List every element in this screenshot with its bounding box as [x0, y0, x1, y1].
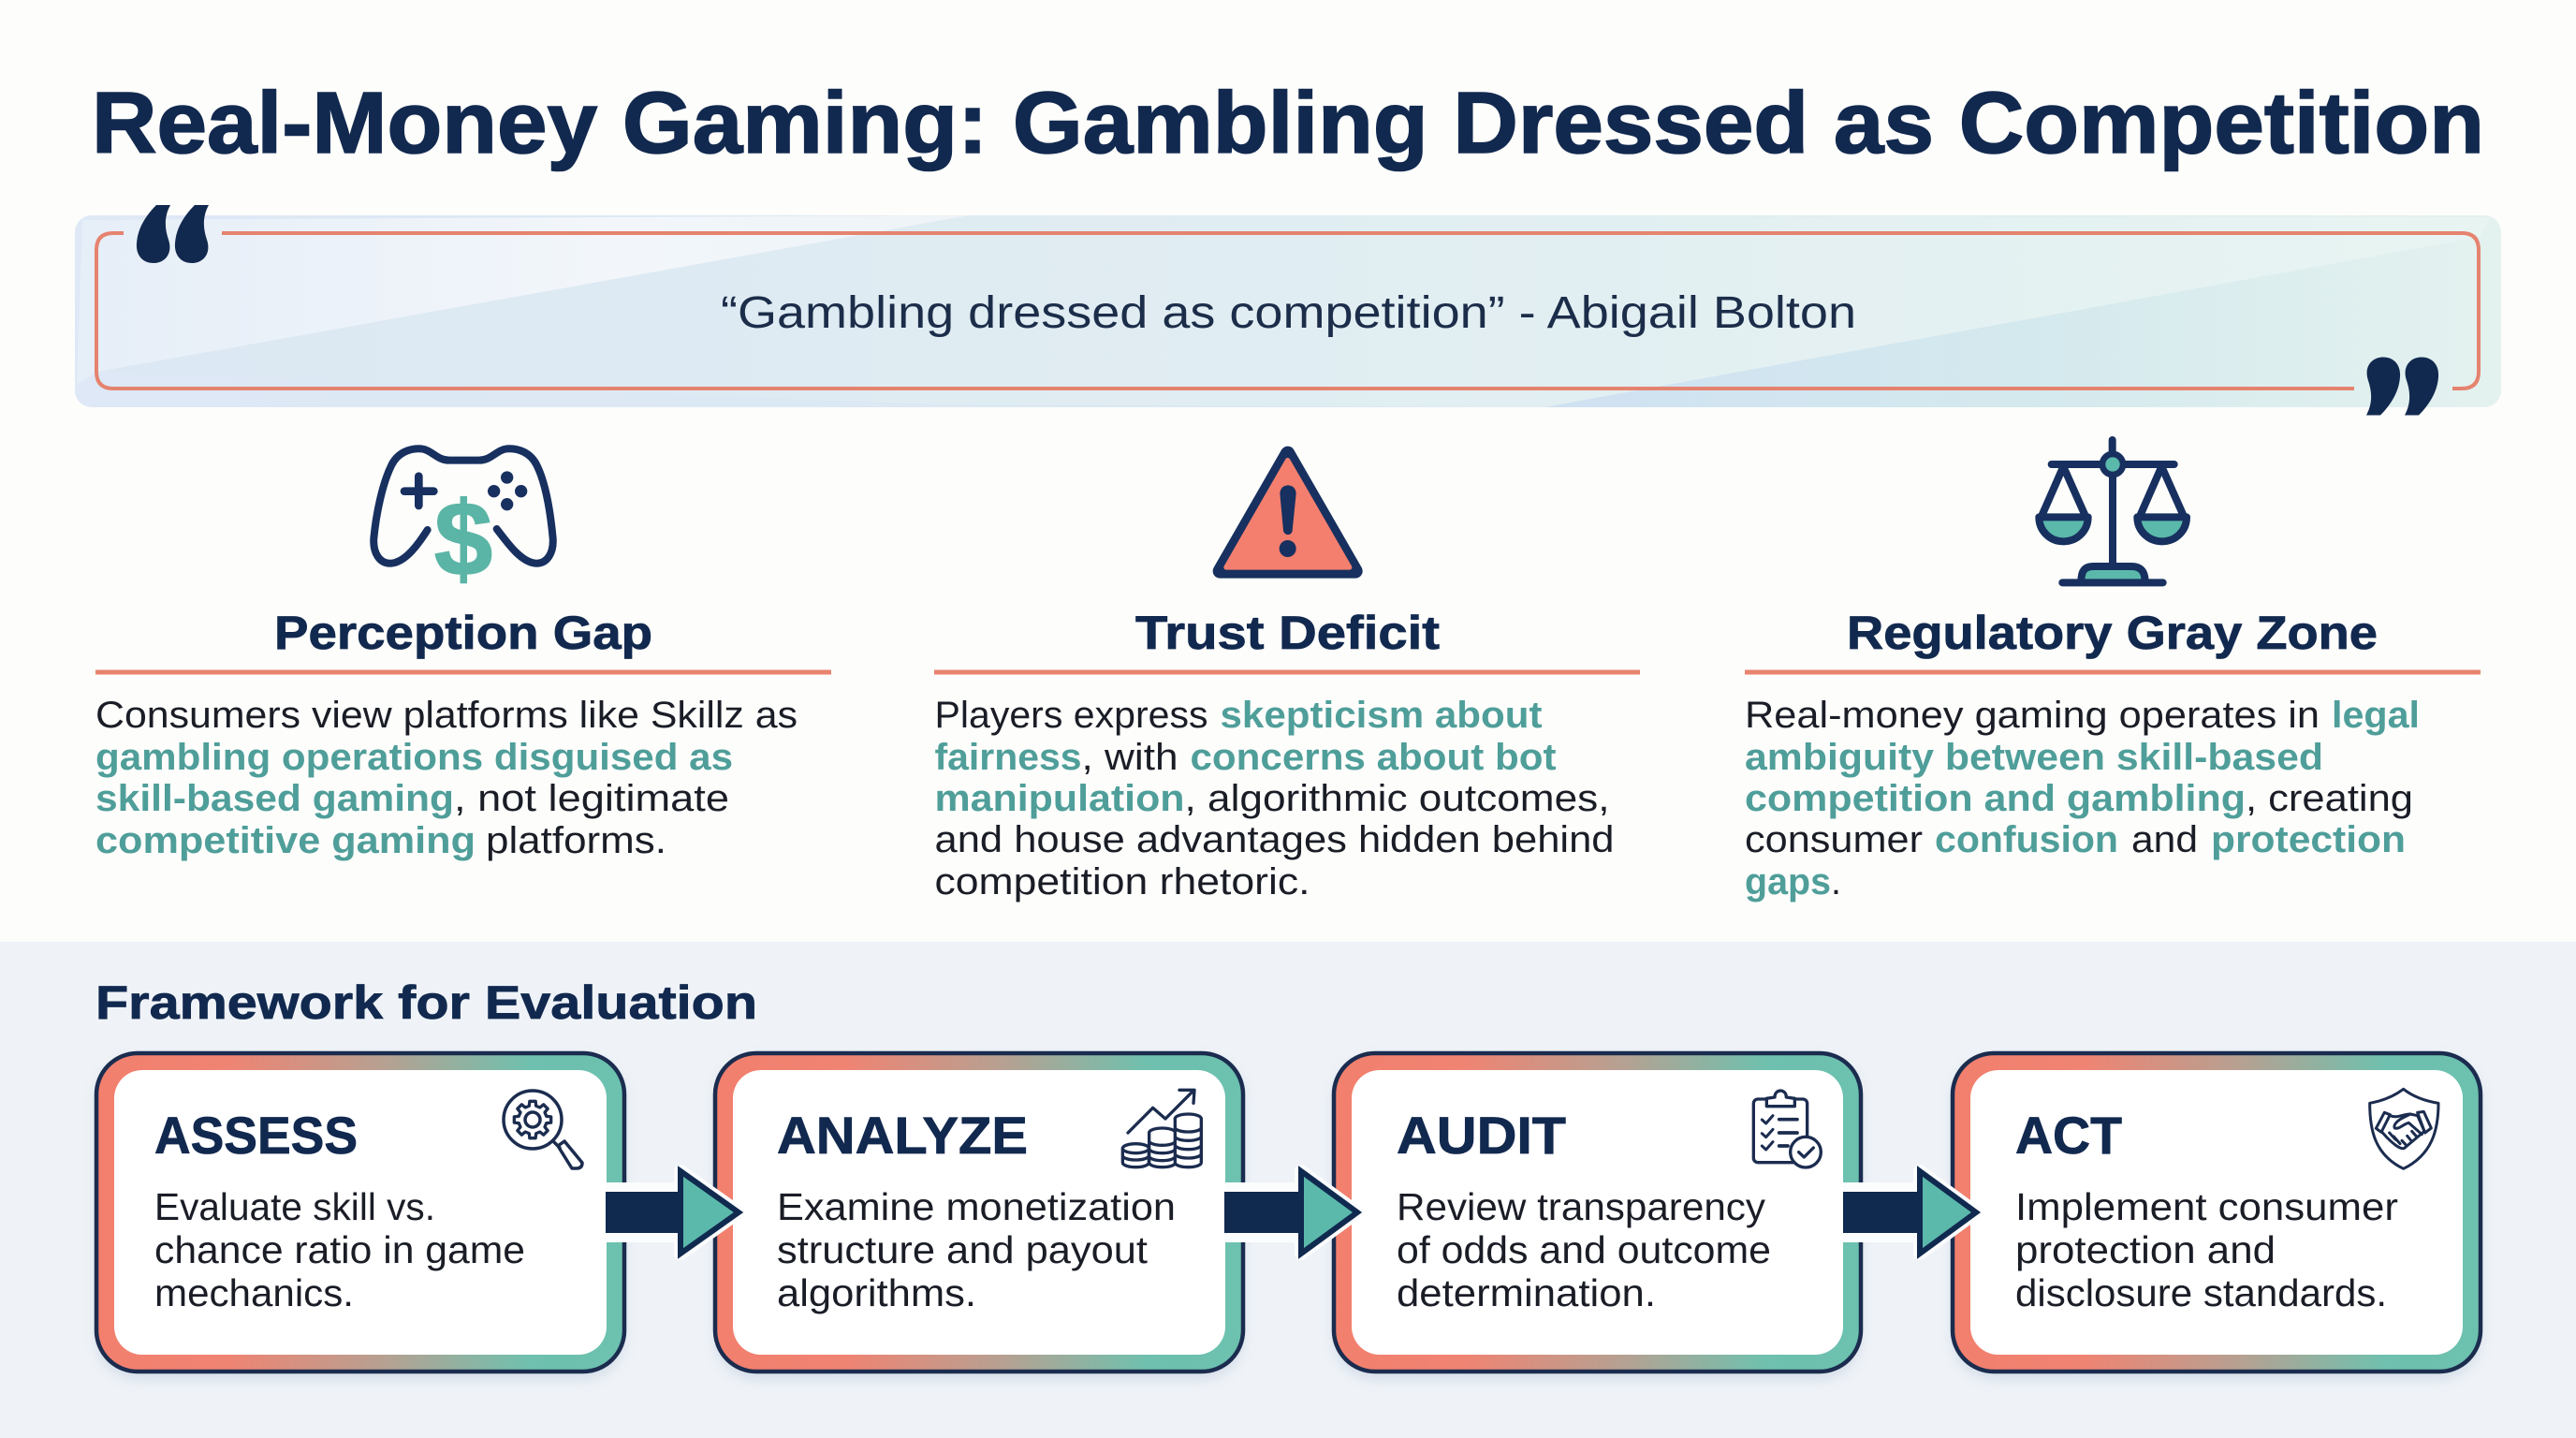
- body text: , with: [1082, 737, 1178, 778]
- body text: and house advantages hidden behind: [934, 819, 1614, 860]
- card: analyze: Examine monetization: [777, 1185, 1176, 1228]
- icon: closing quotation mark: [2366, 358, 2438, 416]
- body text: Real-money gaming operates in: [1745, 695, 2320, 736]
- card: assess: Evaluate skill vs.: [154, 1185, 435, 1228]
- arrow: audit to act: [1843, 1171, 1976, 1254]
- section heading: Framework for Evaluation: [95, 976, 757, 1029]
- body text: concerns about bot: [1191, 737, 1556, 778]
- card: act: [1953, 1053, 2481, 1379]
- arrow: assess to analyze: [606, 1171, 739, 1254]
- card: audit: determination.: [1397, 1271, 1656, 1314]
- panel: regulatory gray zone: [1745, 440, 2481, 902]
- card: analyze: algorithms.: [777, 1271, 976, 1314]
- body text: consumer: [1745, 819, 1923, 860]
- icon: magnifier with gear: [504, 1091, 582, 1168]
- card: audit: [1334, 1053, 1861, 1379]
- icon: clipboard checklist: [1753, 1091, 1821, 1167]
- card: assess: chance ratio in game: [154, 1228, 525, 1271]
- card: act: disclosure standards.: [2015, 1271, 2387, 1314]
- card: assess: ASSESS: [154, 1106, 358, 1165]
- card: audit: Review transparency: [1397, 1185, 1766, 1228]
- quote banner: [75, 205, 2501, 416]
- body text: , algorithmic outcomes,: [1185, 778, 1610, 819]
- body text: skepticism about: [1221, 695, 1543, 736]
- body text: Consumers view platforms like Skillz as: [95, 695, 798, 736]
- body text: and: [2131, 819, 2198, 860]
- body text: Players express: [934, 695, 1208, 736]
- quote text: “Gambling dressed as competition” - Abigail Bolton: [721, 288, 1856, 338]
- body text: competition rhetoric.: [934, 861, 1310, 902]
- card: audit: AUDIT: [1397, 1106, 1566, 1165]
- card: analyze: [715, 1053, 1243, 1379]
- body text: confusion: [1935, 819, 2118, 860]
- title: Real-Money Gaming: Gambling Dressed as Competition: [92, 74, 2484, 171]
- heading: Perception Gap: [274, 607, 652, 659]
- panel: trust deficit: [934, 453, 1640, 902]
- heading: Trust Deficit: [1135, 607, 1440, 659]
- card: act: Implement consumer: [2015, 1185, 2398, 1228]
- panel: perception gap: $: [434, 480, 492, 597]
- body text: competitive gaming: [95, 820, 476, 861]
- panel: perception gap: [95, 448, 831, 861]
- card: act: ACT: [2015, 1106, 2122, 1165]
- icon: coin stacks with rising arrow: [1122, 1090, 1201, 1167]
- icon: shield with handshake: [2370, 1089, 2438, 1168]
- body text: skill-based gaming: [95, 778, 454, 819]
- body text: competition and gambling: [1745, 778, 2246, 819]
- body text: [1745, 695, 2420, 902]
- arrow: analyze to audit: [1224, 1171, 1357, 1254]
- card: audit: of odds and outcome: [1397, 1228, 1771, 1271]
- body text: .: [1831, 861, 1841, 902]
- icon: warning triangle: [1220, 453, 1355, 571]
- icon: opening quotation mark: [137, 205, 209, 263]
- body text: manipulation: [934, 778, 1185, 819]
- body text: , creating: [2246, 778, 2413, 819]
- card: analyze: structure and payout: [777, 1228, 1149, 1271]
- body text: gambling operations disguised as: [95, 737, 733, 778]
- body text: gaps: [1745, 861, 1831, 902]
- icon: balance scales: [2039, 440, 2187, 582]
- body text: protection: [2211, 819, 2406, 860]
- card: assess: mechanics.: [154, 1271, 354, 1314]
- card: act: protection and: [2015, 1228, 2276, 1271]
- body text: [95, 695, 798, 861]
- body text: fairness: [934, 737, 1082, 778]
- body text: ambiguity between skill-based: [1745, 737, 2323, 778]
- panel: framework section: [0, 942, 2576, 1438]
- card: analyze: ANALYZE: [777, 1106, 1028, 1165]
- body text: platforms.: [486, 820, 666, 861]
- body text: [934, 695, 1614, 902]
- heading: Regulatory Gray Zone: [1847, 607, 2378, 659]
- body text: , not legitimate: [454, 778, 729, 819]
- icon: game controller with dollar sign: [373, 448, 553, 564]
- body text: legal: [2332, 695, 2420, 736]
- card: assess: [96, 1053, 624, 1379]
